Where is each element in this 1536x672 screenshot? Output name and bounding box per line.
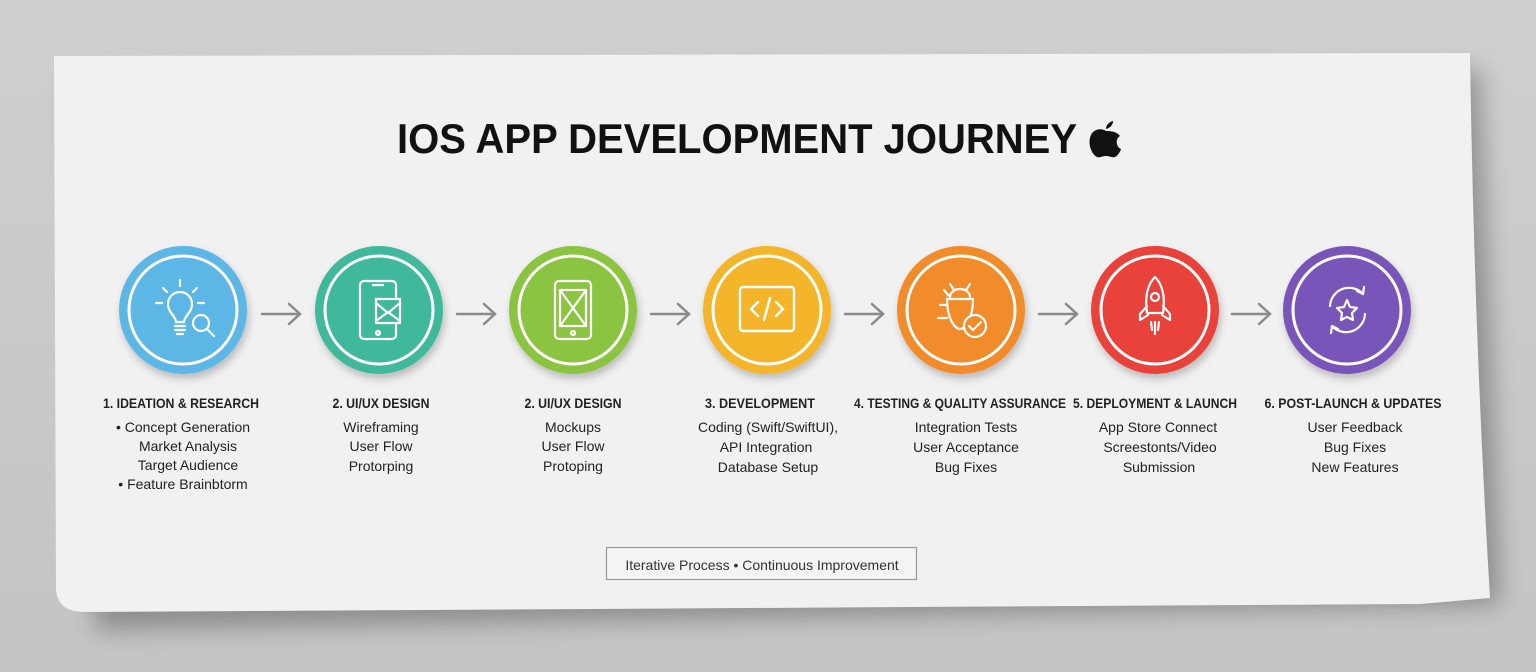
footer badge [606,548,916,580]
text: step 6: Screestonts/Video [1103,439,1217,455]
icon: lightbulb [156,280,214,336]
step 7 circle [1283,246,1411,374]
step 3 circle [509,246,637,374]
text: step 2 [332,395,430,474]
step 2 circle [315,246,443,374]
arrows [262,304,1270,324]
text: step 3: 2. UI/UX DESIGN [524,395,622,411]
text: step 1: Market Analysis [139,438,237,454]
text: step 5: Integration Tests [915,419,1017,435]
icon: rocket [1140,277,1170,334]
text: step 6: App Store Connect [1099,419,1217,435]
icon: apple [1090,121,1121,157]
paper [54,53,1490,612]
text: step 3: Mockups [545,419,601,435]
text: step 3: User Flow [541,438,605,454]
step texts [103,395,1442,492]
icon: mockup [555,281,591,339]
text: step 4: Coding (Swift/SwiftUI), [698,419,838,435]
text: step 7: Bug Fixes [1324,439,1386,455]
text: step 4: Database Setup [718,459,818,475]
text: step 4 [698,395,838,475]
text: step 7 [1264,395,1442,475]
footer badge: Iterative Process • Continuous Improvement [625,557,899,573]
icon: phone wireframe [360,281,400,339]
step 1 circle [119,246,247,374]
text: step 2: Protorping [349,458,413,474]
icon: bug check [938,284,986,337]
text: step 7: 6. POST-LAUNCH & UPDATES [1264,395,1442,411]
text: step 6: 5. DEPLOYMENT & LAUNCH [1073,395,1237,411]
paper shadow [70,70,1500,630]
text: step 1: • Concept Generation [116,419,250,435]
title: IOS APP DEVELOPMENT JOURNEY [397,115,1077,162]
text: step 4: API Integration [720,439,812,455]
icon: code [740,287,794,331]
text: step 1: Target Audience [138,457,238,473]
text: step 6: Submission [1123,459,1195,475]
text: step 1 [103,395,259,492]
step 6 circle [1091,246,1219,374]
text: step 7: New Features [1311,459,1399,475]
text: step 7: User Feedback [1308,419,1403,435]
text: step 5: 4. TESTING & QUALITY ASSURANCE [854,395,1066,411]
text: step 6 [1073,395,1237,475]
text: step 2: 2. UI/UX DESIGN [332,395,430,411]
step 5 circle [897,246,1025,374]
text: step 3 [524,395,622,474]
text: step 4: 3. DEVELOPMENT [705,395,815,411]
icon: refresh star [1330,287,1365,333]
text: step 1: • Feature Brainbtorm [118,476,248,492]
text: step 3: Protoping [543,458,603,474]
step 4 circle [703,246,831,374]
text: step 2: Wireframing [343,419,419,435]
text: step 2: User Flow [349,438,413,454]
text: step 5: User Acceptance [913,439,1019,455]
text: step 5: Bug Fixes [935,459,997,475]
text: step 1: 1. IDEATION & RESEARCH [103,395,259,411]
text: step 5 [854,395,1066,475]
